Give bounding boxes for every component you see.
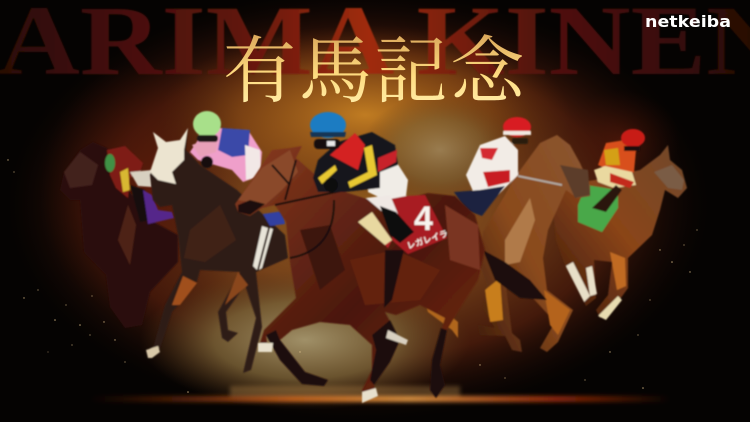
tail [483, 250, 547, 300]
jockey 1 [105, 146, 152, 222]
jockey 4 [454, 117, 531, 216]
saddle cloth with number [358, 195, 449, 254]
logo: netkeiba: netkeiba [645, 12, 731, 31]
title: 有馬記念: 有馬記念 [223, 31, 527, 112]
horse and jockey: centre, number 4 Regaleira [235, 112, 485, 403]
saddle cloth: green [578, 185, 618, 232]
jockey 5 [592, 129, 645, 212]
horse and jockey: orange silks [553, 129, 687, 320]
horse 4 body [478, 135, 590, 352]
saddle cloth: purple [143, 190, 174, 224]
horse and jockey: pink and blue silks [146, 111, 288, 373]
jockey 3 [310, 112, 414, 243]
horse and jockey: far left [60, 142, 178, 328]
number 4: 4 [414, 200, 433, 238]
girth stripes [253, 226, 273, 270]
dark lower legs [266, 320, 447, 398]
horse 2 body [148, 128, 288, 373]
horse 3 body [235, 146, 485, 403]
horse and jockey: red and white silks [454, 117, 590, 352]
jockey 2 [190, 111, 262, 182]
dust particles [7, 159, 698, 393]
horse 5 body [553, 145, 687, 318]
bridle and reins [272, 160, 345, 258]
bottom light streak [90, 386, 670, 402]
far hind leg [424, 290, 458, 338]
horse name: レガレイラ [406, 228, 449, 251]
horse 1 body [60, 142, 178, 328]
saddle cloth: blue [263, 211, 285, 226]
reins [518, 176, 562, 185]
